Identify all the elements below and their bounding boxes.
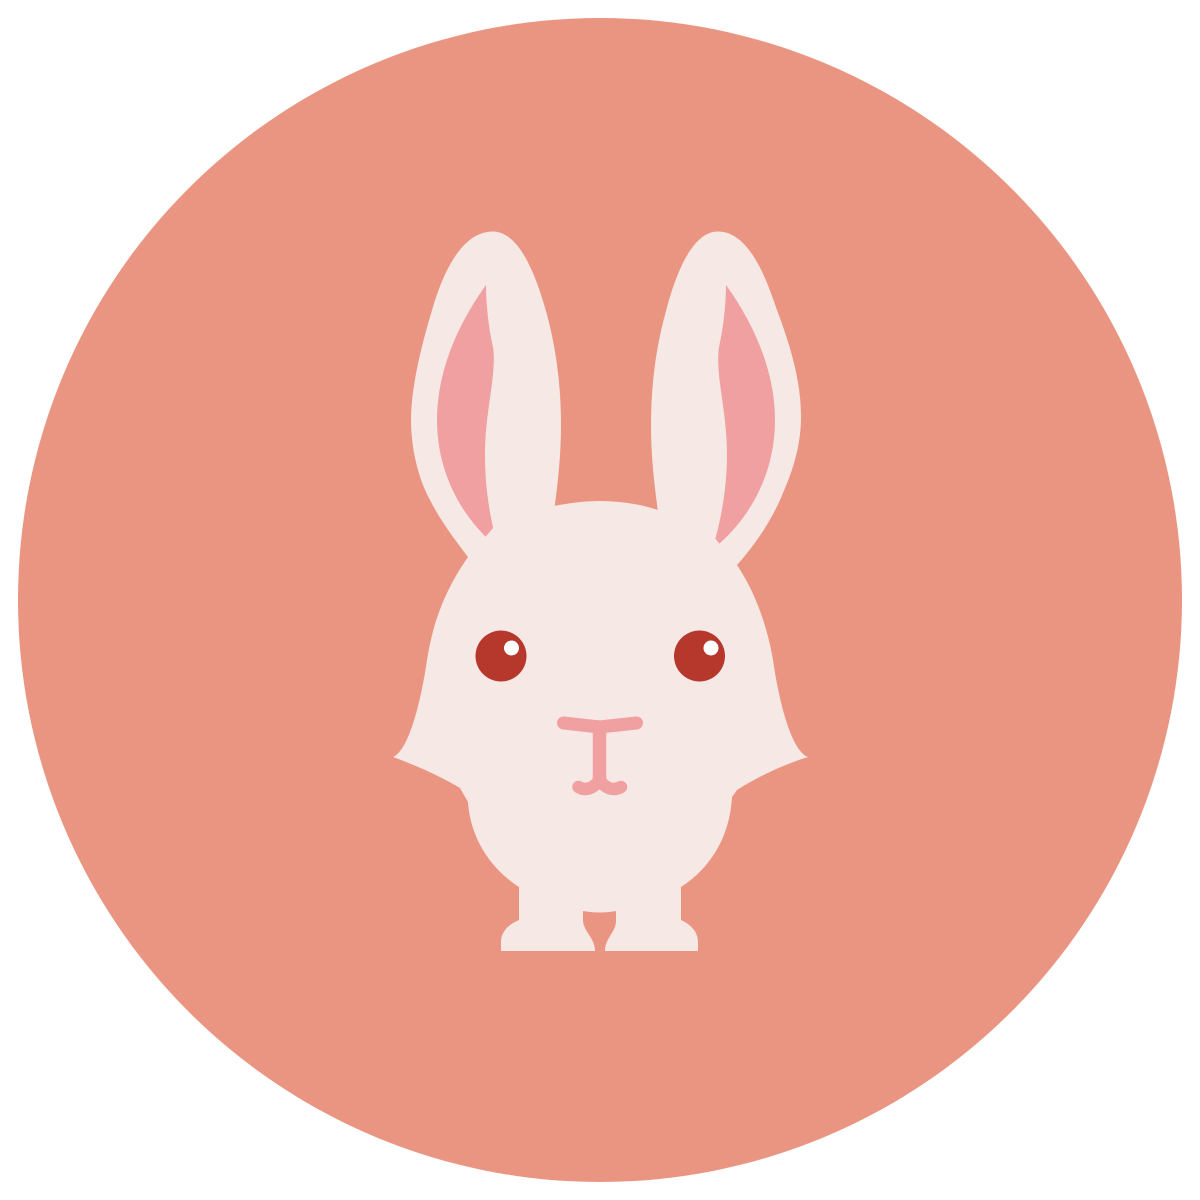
rabbit (393, 232, 808, 951)
right eye highlight (704, 640, 718, 656)
left pupil (476, 630, 526, 682)
left ear inner (437, 285, 494, 538)
left ear (411, 232, 561, 560)
right ear (651, 232, 801, 568)
right ear outer (651, 232, 801, 568)
left eye (476, 630, 526, 682)
nose and mouth (564, 723, 636, 789)
right eye (674, 630, 725, 682)
left eye highlight (504, 640, 519, 656)
right pupil (674, 630, 725, 682)
left ear outer (411, 232, 561, 560)
head and body (393, 501, 808, 951)
right ear inner (715, 285, 775, 544)
